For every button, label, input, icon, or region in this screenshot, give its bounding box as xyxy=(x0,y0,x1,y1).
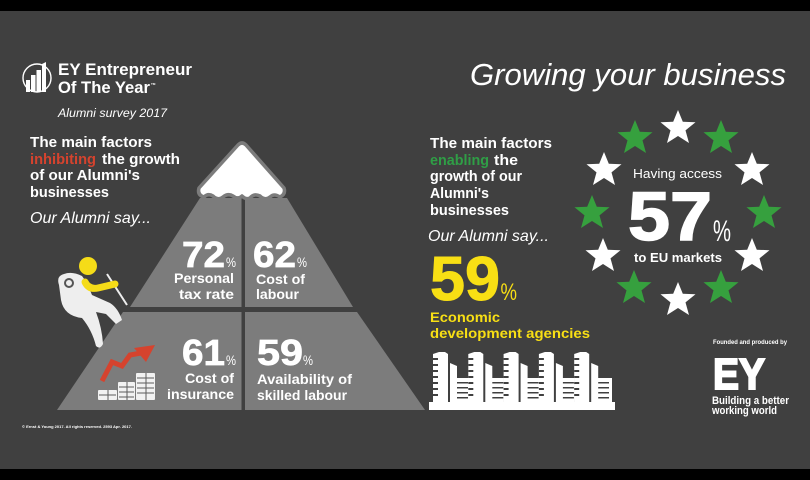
stat: economic development agencies: % xyxy=(500,279,517,306)
icon: city skyline xyxy=(429,352,615,410)
logo wordmark: Of The Year xyxy=(58,78,150,97)
tier: personal tax rate: 72 xyxy=(182,234,225,275)
tier: cost of labour: Cost of xyxy=(256,271,305,287)
pyramid chart xyxy=(57,143,425,410)
tier: cost of insurance xyxy=(167,332,236,402)
copyright: © Ernst & Young 2017. All rights reserved. 2593 Apr. 2017. xyxy=(22,424,132,429)
tier: availability of skilled labour: 59 xyxy=(257,332,303,373)
head xyxy=(79,257,97,275)
stat: economic development agencies: Economic xyxy=(430,309,500,325)
heading: inhibiting factors: businesses xyxy=(30,185,109,201)
heading: inhibiting factors: inhibiting xyxy=(30,152,96,168)
tier: cost of insurance: 61 xyxy=(182,332,225,373)
heading: enabling factors: enabling xyxy=(430,153,489,169)
main title: Growing your business xyxy=(470,57,786,92)
EY brand block: Building a better xyxy=(712,395,790,407)
stat: 57% access to EU markets xyxy=(628,166,731,265)
heading: enabling factors: businesses xyxy=(430,203,509,219)
green stars xyxy=(574,120,782,303)
tier: personal tax rate: tax rate xyxy=(179,286,234,302)
heading: inhibiting factors: of our Alumni's xyxy=(30,168,140,184)
tier: cost of insurance: insurance xyxy=(167,386,234,402)
stat: 57% access to EU markets: Having access xyxy=(633,166,723,181)
heading: enabling factors: the xyxy=(494,153,518,169)
stat: economic development agencies: development agencies xyxy=(430,325,590,341)
tier: personal tax rate xyxy=(174,234,236,302)
our alumni say, left: Our Alumni say... xyxy=(30,210,151,227)
tier: cost of insurance: Cost of xyxy=(185,370,234,386)
backpack and body xyxy=(58,273,122,348)
logo wordmark xyxy=(58,60,192,97)
survey subtitle: Alumni survey 2017 xyxy=(57,106,168,120)
ring of stars xyxy=(574,110,782,315)
heading: enabling factors: The main factors xyxy=(430,136,552,152)
icon: bar chart in circle xyxy=(23,62,51,92)
EY brand block: EY xyxy=(713,350,765,399)
logo wordmark: TM xyxy=(151,82,156,86)
tier: cost of labour: % xyxy=(297,254,307,270)
tier: availability of skilled labour: Availability of xyxy=(257,371,352,387)
backpack detail xyxy=(65,279,73,287)
tier: personal tax rate: Personal xyxy=(174,270,234,286)
heading: enabling factors: Alumni's xyxy=(430,186,489,202)
tier: availability of skilled labour: % xyxy=(303,352,313,368)
red arrow xyxy=(102,353,141,381)
heading: inhibiting factors: the growth xyxy=(102,152,180,168)
icon: climber xyxy=(58,257,127,348)
mountain tiers xyxy=(57,198,425,410)
stat: economic development agencies: 59 xyxy=(430,245,500,314)
heading: enabling factors xyxy=(430,136,552,219)
icon: rising red arrow over coin stacks xyxy=(98,345,155,400)
heading: inhibiting factors xyxy=(30,135,180,201)
tier: cost of labour xyxy=(253,234,307,302)
snow cap xyxy=(199,143,284,199)
stat: 57% access to EU markets: to EU markets xyxy=(634,250,722,265)
EY brand block: working world xyxy=(711,405,777,417)
logo: EY Entrepreneur Of The Year xyxy=(23,60,192,97)
EY brand block: Founded and produced by xyxy=(713,339,787,346)
tier: cost of labour: 62 xyxy=(253,234,296,275)
heading: inhibiting factors: The main factors xyxy=(30,135,152,151)
our alumni say, right: Our Alumni say... xyxy=(428,228,549,245)
EY brand block xyxy=(711,339,790,417)
stat: economic development agencies xyxy=(430,245,590,341)
white stars xyxy=(586,110,770,315)
arm xyxy=(85,282,115,288)
climbing pole xyxy=(107,274,127,305)
logo wordmark: EY Entrepreneur xyxy=(58,60,192,79)
stat: 57% access to EU markets: 57 xyxy=(628,178,712,255)
tier: cost of labour: labour xyxy=(256,286,300,302)
tier: availability of skilled labour xyxy=(257,332,352,403)
tier: personal tax rate: % xyxy=(226,254,236,270)
coin stacks xyxy=(98,373,155,400)
tier: cost of insurance: % xyxy=(226,352,236,368)
heading: enabling factors: growth of our xyxy=(430,169,522,185)
tier: availability of skilled labour: skilled labour xyxy=(257,387,348,403)
stat: 57% access to EU markets: % xyxy=(713,215,731,248)
